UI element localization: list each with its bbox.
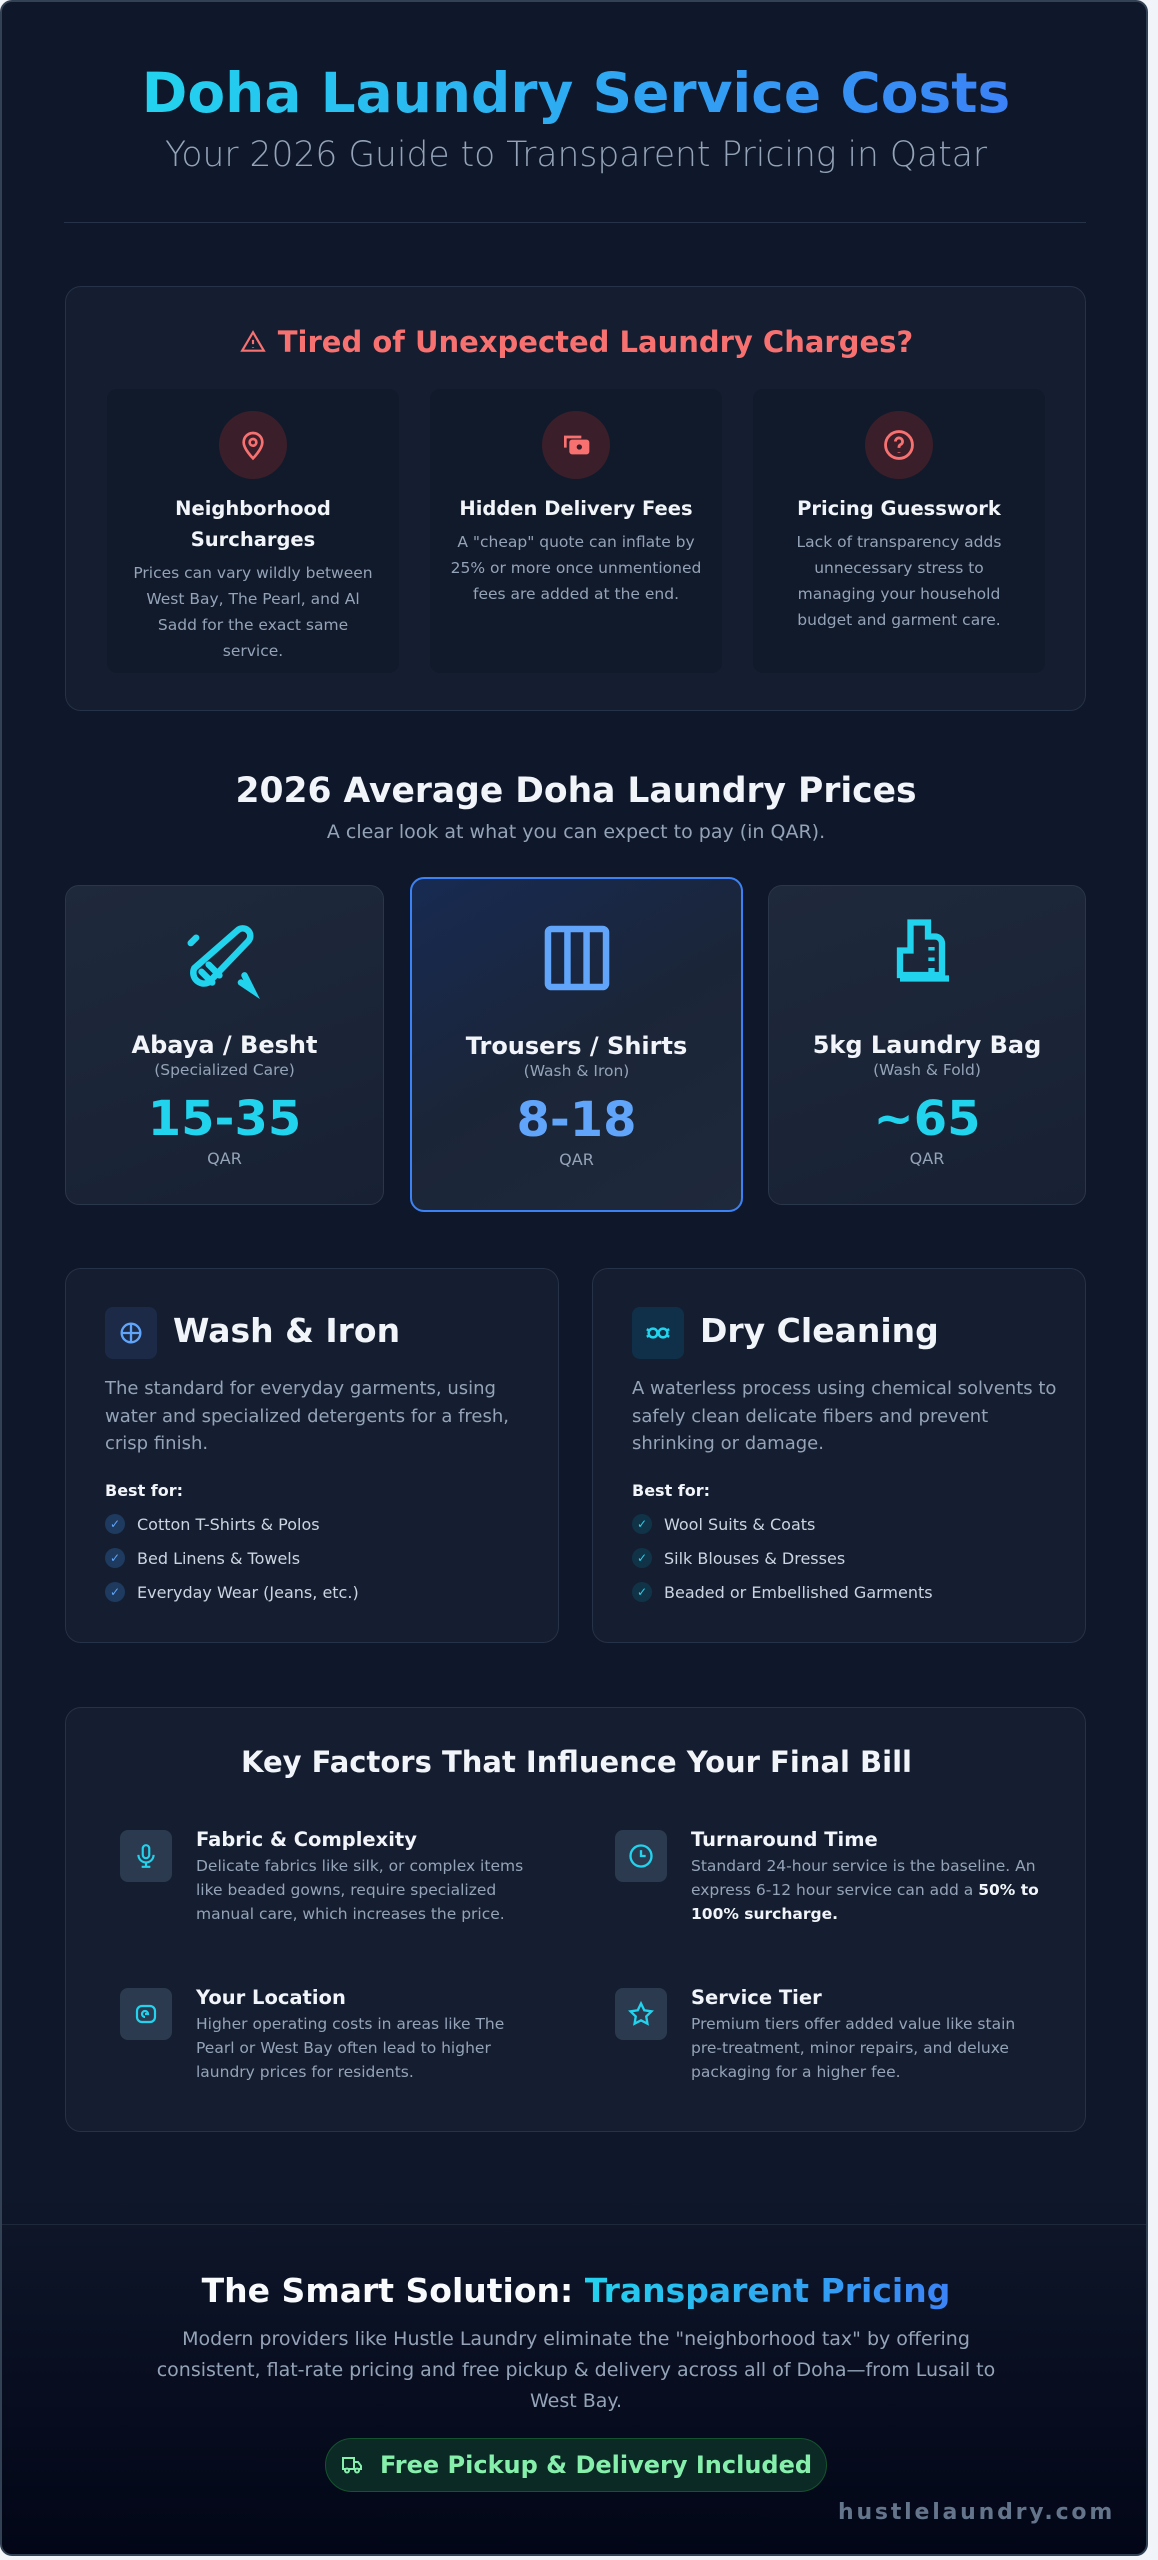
subheading: A clear look at what you can expect to pay (in QAR). (327, 821, 825, 843)
factor: turnaround: Turnaround Time (691, 1828, 878, 1851)
icon: location pin (219, 411, 287, 479)
panel: unexpected charges (65, 286, 1086, 711)
heading: tired of charges: Tired of Unexpected Laundry Charges? (278, 325, 913, 359)
price card: trousers: (Wash & Iron) (524, 1062, 629, 1080)
panel: wash & iron (65, 1268, 559, 1643)
price card: abaya: Abaya / Besht (132, 1031, 317, 1059)
list: wash items: Cotton T-Shirts & Polos (137, 1514, 320, 1534)
price card: laundry bag (768, 885, 1086, 1205)
panel: wash & iron: The standard for everyday garments, using water and specialized detergents for a fresh, crisp finish. (105, 1378, 509, 1454)
heading: smart solution: The Smart Solution: Transparent Pricing (202, 2271, 950, 2310)
panel: dry cleaning (592, 1268, 1086, 1643)
price card: trousers: QAR (559, 1150, 594, 1169)
panel: dry cleaning: Best for: (632, 1481, 710, 1500)
factor: turnaround (615, 1828, 1039, 1923)
list: dry cleaning items: ✓ (637, 1551, 647, 1565)
list: wash items: ✓ (110, 1517, 120, 1531)
factor: service tier (615, 1986, 1015, 2081)
price card: laundry bag: 5kg Laundry Bag (813, 1031, 1041, 1059)
list: wash items: Everyday Wear (Jeans, etc.) (137, 1582, 359, 1602)
factor: service tier: Service Tier (691, 1986, 822, 2009)
card: hidden delivery fees: Hidden Delivery Fees (459, 497, 693, 520)
list: wash items: ✓ (110, 1585, 120, 1599)
card: neighborhood surcharges: Neighborhood Surcharges (175, 497, 331, 551)
factor: fabric: Fabric & Complexity (196, 1828, 417, 1851)
factor: turnaround: Standard 24-hour service is the baseline. An express 6-12 hour service can add a 50% to 100% surcharge. (691, 1857, 1039, 1923)
card: pricing guesswork (753, 389, 1045, 673)
price card: laundry bag: (Wash & Fold) (873, 1061, 981, 1079)
icon: question (865, 411, 933, 479)
factor: service tier: Premium tiers offer added value like stain pre-treatment, minor repairs, and deluxe packaging for a higher fee. (691, 2015, 1015, 2081)
subtitle: Your 2026 Guide to Transparent Pricing in Qatar (165, 135, 987, 175)
heading: key factors: Key Factors That Influence Your Final Bill (241, 1745, 912, 1779)
price card: abaya: (Specialized Care) (154, 1061, 295, 1079)
panel: wash & iron: Wash & Iron (173, 1311, 400, 1350)
card: hidden delivery fees (430, 389, 722, 673)
icon: cash (542, 411, 610, 479)
list: dry cleaning items (632, 1514, 933, 1602)
price card: laundry bag: ~65 (873, 1091, 980, 1147)
factor: location: Your Location (196, 1986, 346, 2009)
icon: columns (544, 926, 610, 990)
card: pricing guesswork: Lack of transparency adds unnecessary stress to managing your household budget and garment care. (797, 533, 1001, 629)
heading: average prices: 2026 Average Doha Laundry Prices (235, 771, 917, 811)
factor: location (120, 1986, 504, 2081)
list: wash items (105, 1514, 359, 1602)
price card: abaya (65, 885, 384, 1205)
pill: free pickup (325, 2438, 827, 2492)
factor: fabric (120, 1828, 523, 1923)
list: dry cleaning items: ✓ (637, 1585, 647, 1599)
price card: abaya: 15-35 (148, 1091, 301, 1147)
factor: location: Higher operating costs in areas like The Pearl or West Bay often lead to higher laundry prices for residents. (196, 2015, 504, 2081)
icon: dry cleaning (632, 1307, 684, 1359)
pill: free pickup: Free Pickup & Delivery Included (380, 2451, 812, 2479)
card: hidden delivery fees: A "cheap" quote can inflate by 25% or more once unmentioned fees are added at the end. (451, 533, 701, 603)
panel: dry cleaning: A waterless process using chemical solvents to safely clean delicate fibers and prevent shrinking or damage. (632, 1378, 1056, 1454)
icon: needle (188, 925, 260, 999)
icon: wash (105, 1307, 157, 1359)
list: dry cleaning items: Silk Blouses & Dresses (664, 1548, 845, 1568)
list: dry cleaning items: Beaded or Embellished Garments (664, 1582, 933, 1602)
price card: trousers: Trousers / Shirts (466, 1032, 687, 1060)
panel: key factors (65, 1707, 1086, 2132)
brand url: hustlelaundry.com (838, 2500, 1115, 2525)
price card: laundry bag: QAR (910, 1149, 944, 1168)
list: dry cleaning items: ✓ (637, 1517, 647, 1531)
list: wash items: ✓ (110, 1551, 120, 1565)
price card: trousers (410, 877, 743, 1212)
price card: abaya: QAR (207, 1149, 242, 1168)
card: pricing guesswork: Pricing Guesswork (797, 497, 1001, 520)
panel: wash & iron: Best for: (105, 1481, 183, 1500)
panel: dry cleaning: Dry Cleaning (700, 1311, 939, 1350)
factor: fabric: Delicate fabrics like silk, or complex items like beaded gowns, require specialized manual care, which increases the price. (196, 1857, 523, 1923)
title: Doha Laundry Service Costs (142, 61, 1010, 125)
price card: trousers: 8-18 (516, 1092, 637, 1148)
card: neighborhood surcharges: Prices can vary wildly between West Bay, The Pearl, and Al Sadd for the exact same service. (133, 564, 373, 660)
paragraph: solution: Modern providers like Hustle Laundry eliminate the "neighborhood tax" by offering consistent, flat-rate pricing and free pickup & delivery across all of Doha—from Lusail to West Bay. (157, 2328, 995, 2412)
icon: iron (896, 919, 949, 982)
list: wash items: Bed Linens & Towels (137, 1548, 300, 1568)
card: neighborhood surcharges (107, 389, 399, 673)
list: dry cleaning items: Wool Suits & Coats (664, 1514, 815, 1534)
